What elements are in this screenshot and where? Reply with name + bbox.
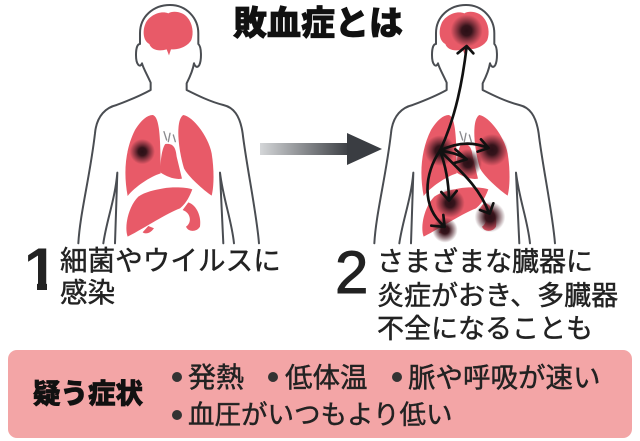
step 2 text: 不全になることも <box>377 314 593 344</box>
symptoms list <box>172 362 600 430</box>
spread arrows <box>427 46 493 227</box>
step 1 text <box>60 245 281 308</box>
number 1: 1 <box>24 236 57 303</box>
step 2 <box>335 239 618 344</box>
symptoms panel background <box>8 350 632 438</box>
symptom: fast pulse and breathing: 脈や呼吸が速い <box>408 362 600 393</box>
title: 敗血症とは <box>233 5 403 43</box>
step 1 <box>28 245 281 308</box>
step 1 text: 細菌やウイルスに <box>60 245 281 276</box>
symptom: fever: 発熱 <box>188 362 244 393</box>
arrow between figures <box>260 133 382 165</box>
step 2 text <box>377 247 618 344</box>
figure 1: body with infected lung <box>78 5 259 243</box>
infection spot <box>130 139 155 164</box>
symptom: low blood pressure: 血圧がいつもより低い <box>188 400 452 430</box>
symptom: low temperature: 低体温 <box>285 362 368 393</box>
figure 2: body with spreading infection <box>374 5 555 243</box>
step 2 text: さまざまな臓器に <box>377 247 593 277</box>
number 2: 2 <box>335 239 368 306</box>
step 2 text: 炎症がおき、多臓器 <box>377 280 618 310</box>
symptoms heading: 疑う症状 <box>33 378 143 409</box>
step 1 text: 感染 <box>60 277 115 308</box>
